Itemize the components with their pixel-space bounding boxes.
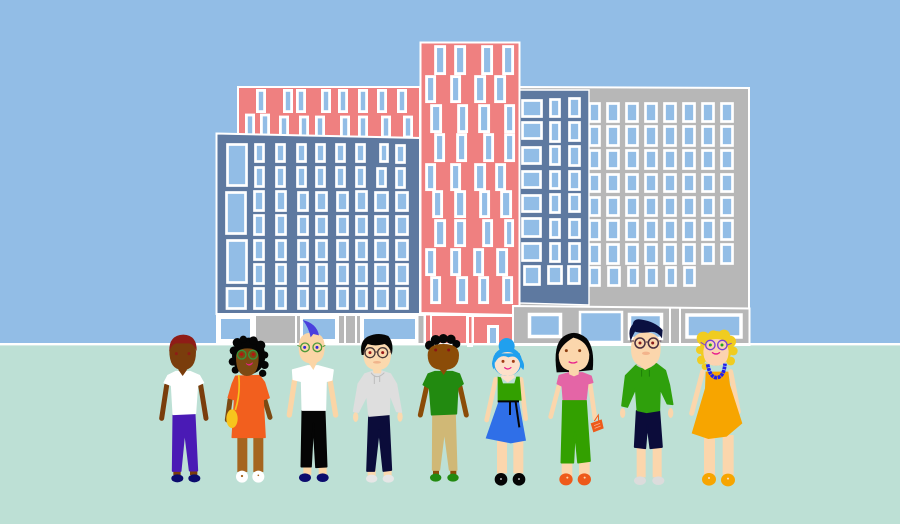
ground (0, 344, 900, 524)
person 1: white t-shirt, purple trousers (162, 335, 206, 482)
building: blue middle block (519, 90, 589, 305)
person 2: orange dress, yellow bag (226, 336, 270, 483)
building: right ground floor (513, 306, 750, 345)
person 4: grey hoodie, navy trousers (353, 334, 403, 483)
people, second group (353, 334, 526, 486)
person 5: green t-shirt, khaki trousers (420, 334, 466, 482)
person 9: blonde hair, orange dress, blue necklace (692, 330, 742, 486)
people, first group (162, 320, 336, 483)
sky (0, 0, 900, 345)
horizon line (0, 343, 900, 345)
person 6: blue hair, green top, blue skirt (486, 338, 526, 486)
building: tower ground floor (424, 314, 514, 347)
building: pink central tower (420, 42, 520, 315)
people, third group (551, 319, 742, 486)
person 3: blue mohawk, white t-shirt, black trousers (289, 320, 336, 482)
building: blue left block (216, 134, 420, 314)
person 8: green hoodie, navy shorts (620, 319, 673, 485)
person 7: pink top, green trousers, orange bag (551, 333, 604, 485)
building: grey right block (518, 87, 749, 310)
building: pink back block (238, 87, 420, 140)
building: left ground floor (216, 314, 424, 344)
